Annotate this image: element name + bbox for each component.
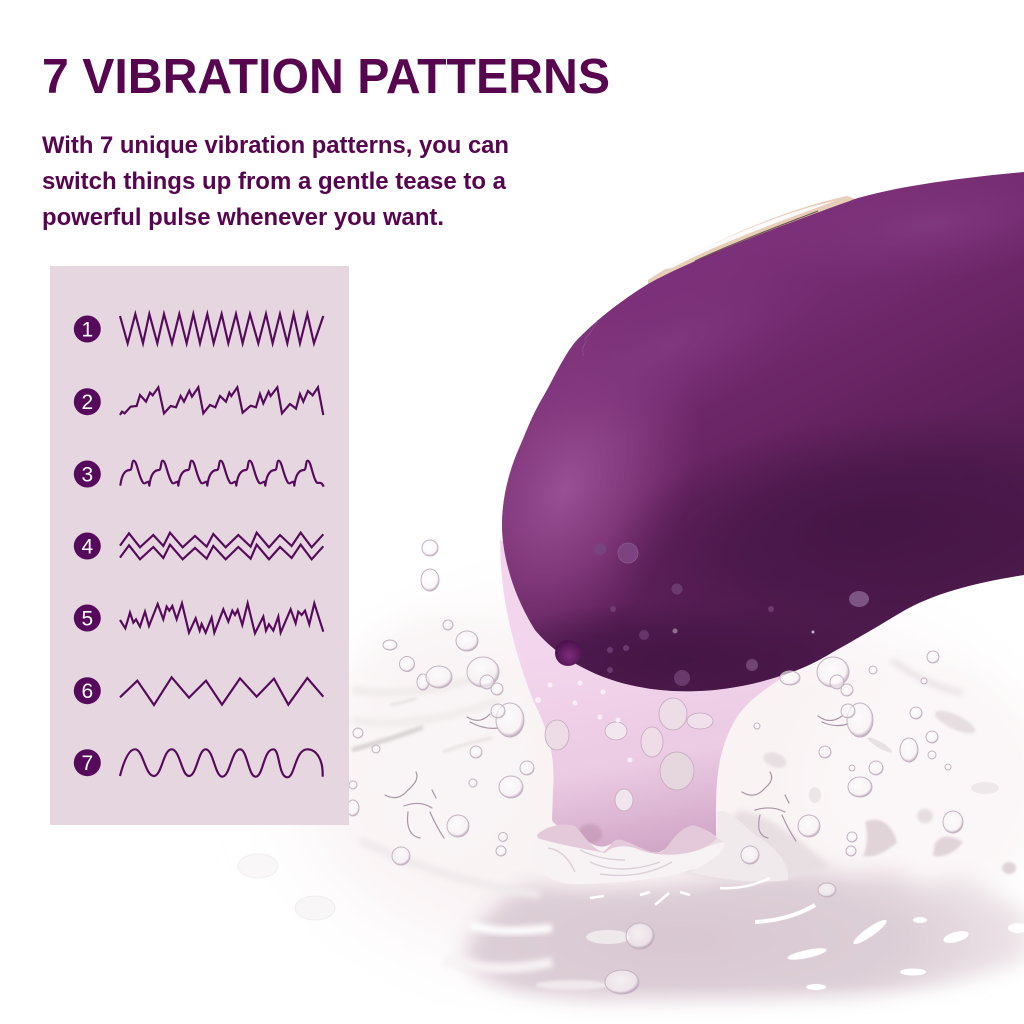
pattern 2: 2 xyxy=(81,391,93,414)
pattern 7 xyxy=(74,749,323,777)
panel: vibration patterns xyxy=(50,266,349,825)
pattern 2 xyxy=(74,387,323,415)
description text xyxy=(42,132,509,231)
description text: With 7 unique vibration patterns, you can xyxy=(42,132,509,159)
pattern 5 xyxy=(74,603,323,633)
water droplets on body xyxy=(555,543,869,686)
device neck: light pink xyxy=(500,540,790,853)
water droplets on neck xyxy=(535,680,713,811)
pattern 3 xyxy=(74,460,324,488)
description text: switch things up from a gentle tease to a xyxy=(42,168,506,195)
pattern 4 xyxy=(74,532,323,560)
pattern 5: 5 xyxy=(81,608,93,630)
device control button xyxy=(648,196,856,286)
pattern 3: 3 xyxy=(81,464,93,486)
title: 7 VIBRATION PATTERNS xyxy=(42,49,610,104)
pattern 6: 6 xyxy=(81,680,93,703)
pattern 6 xyxy=(74,677,323,705)
description text: powerful pulse whenever you want. xyxy=(42,204,444,231)
pattern 4: 4 xyxy=(81,536,93,558)
pattern 7: 7 xyxy=(81,752,93,775)
device body: purple xyxy=(502,172,1024,692)
splash rim around base xyxy=(530,811,788,905)
pattern 1 xyxy=(74,314,323,343)
pattern 1: 1 xyxy=(81,318,93,342)
water splash droplets xyxy=(238,540,963,994)
water pool and ripples xyxy=(300,600,1024,1024)
water splash scribbles xyxy=(385,714,848,841)
